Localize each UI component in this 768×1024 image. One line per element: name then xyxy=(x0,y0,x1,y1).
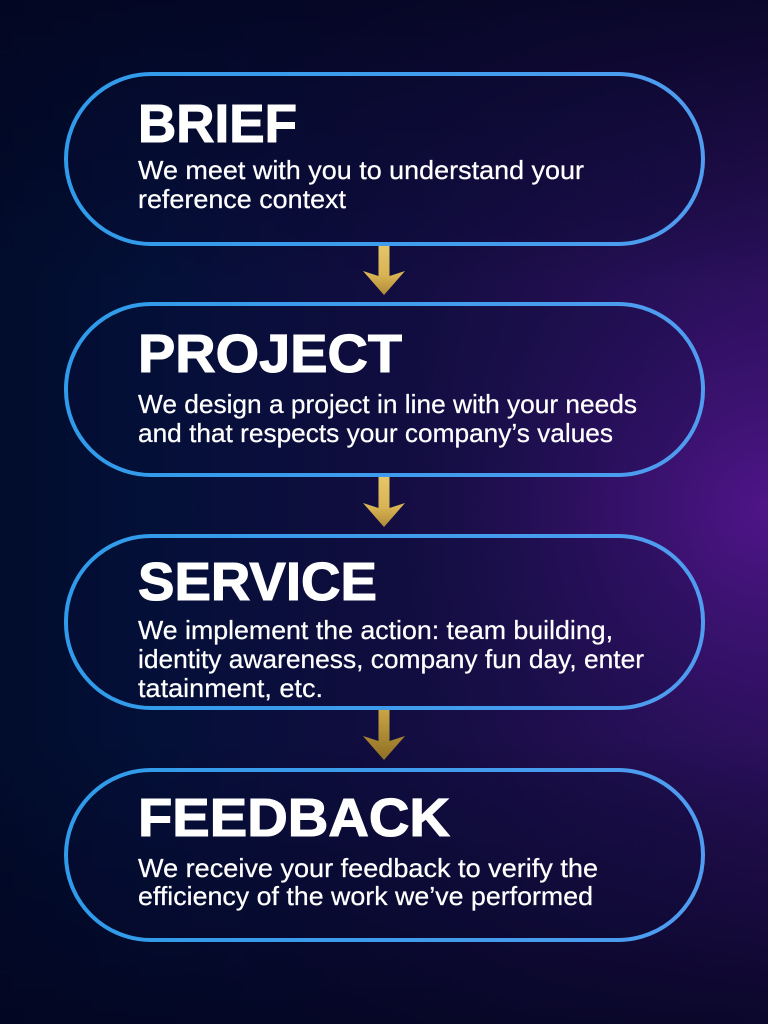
heading: service: SERVICE xyxy=(138,552,377,612)
panel: service xyxy=(66,536,703,708)
text: brief description: reference context xyxy=(138,184,347,214)
text: project description: and that respects your company’s values xyxy=(138,418,613,448)
text: feedback description: We receive your feedback to verify the xyxy=(138,853,598,883)
arrow: brief to project xyxy=(363,245,405,295)
text: feedback description: efficiency of the work we’ve performed xyxy=(138,881,593,911)
arrow: service to feedback xyxy=(363,710,405,760)
panel: project xyxy=(66,304,703,475)
text: brief description xyxy=(138,155,584,214)
panel: brief xyxy=(66,74,703,244)
text: brief description: We meet with you to understand your xyxy=(138,155,584,185)
text: feedback description xyxy=(138,853,598,911)
heading: brief: BRIEF xyxy=(138,94,297,154)
arrow: project to service xyxy=(363,477,405,527)
text: service description: We implement the action: team building, xyxy=(138,615,613,645)
text: service description xyxy=(138,615,644,703)
text: service description: identity awareness, company fun day, enter xyxy=(138,644,644,674)
text: service description: tatainment, etc. xyxy=(138,673,323,703)
panel: feedback xyxy=(66,770,703,940)
heading: project: PROJECT xyxy=(138,324,402,384)
text: project description: We design a project in line with your needs xyxy=(138,389,637,419)
heading: feedback: FEEDBACK xyxy=(138,788,450,848)
text: project description xyxy=(138,389,637,448)
